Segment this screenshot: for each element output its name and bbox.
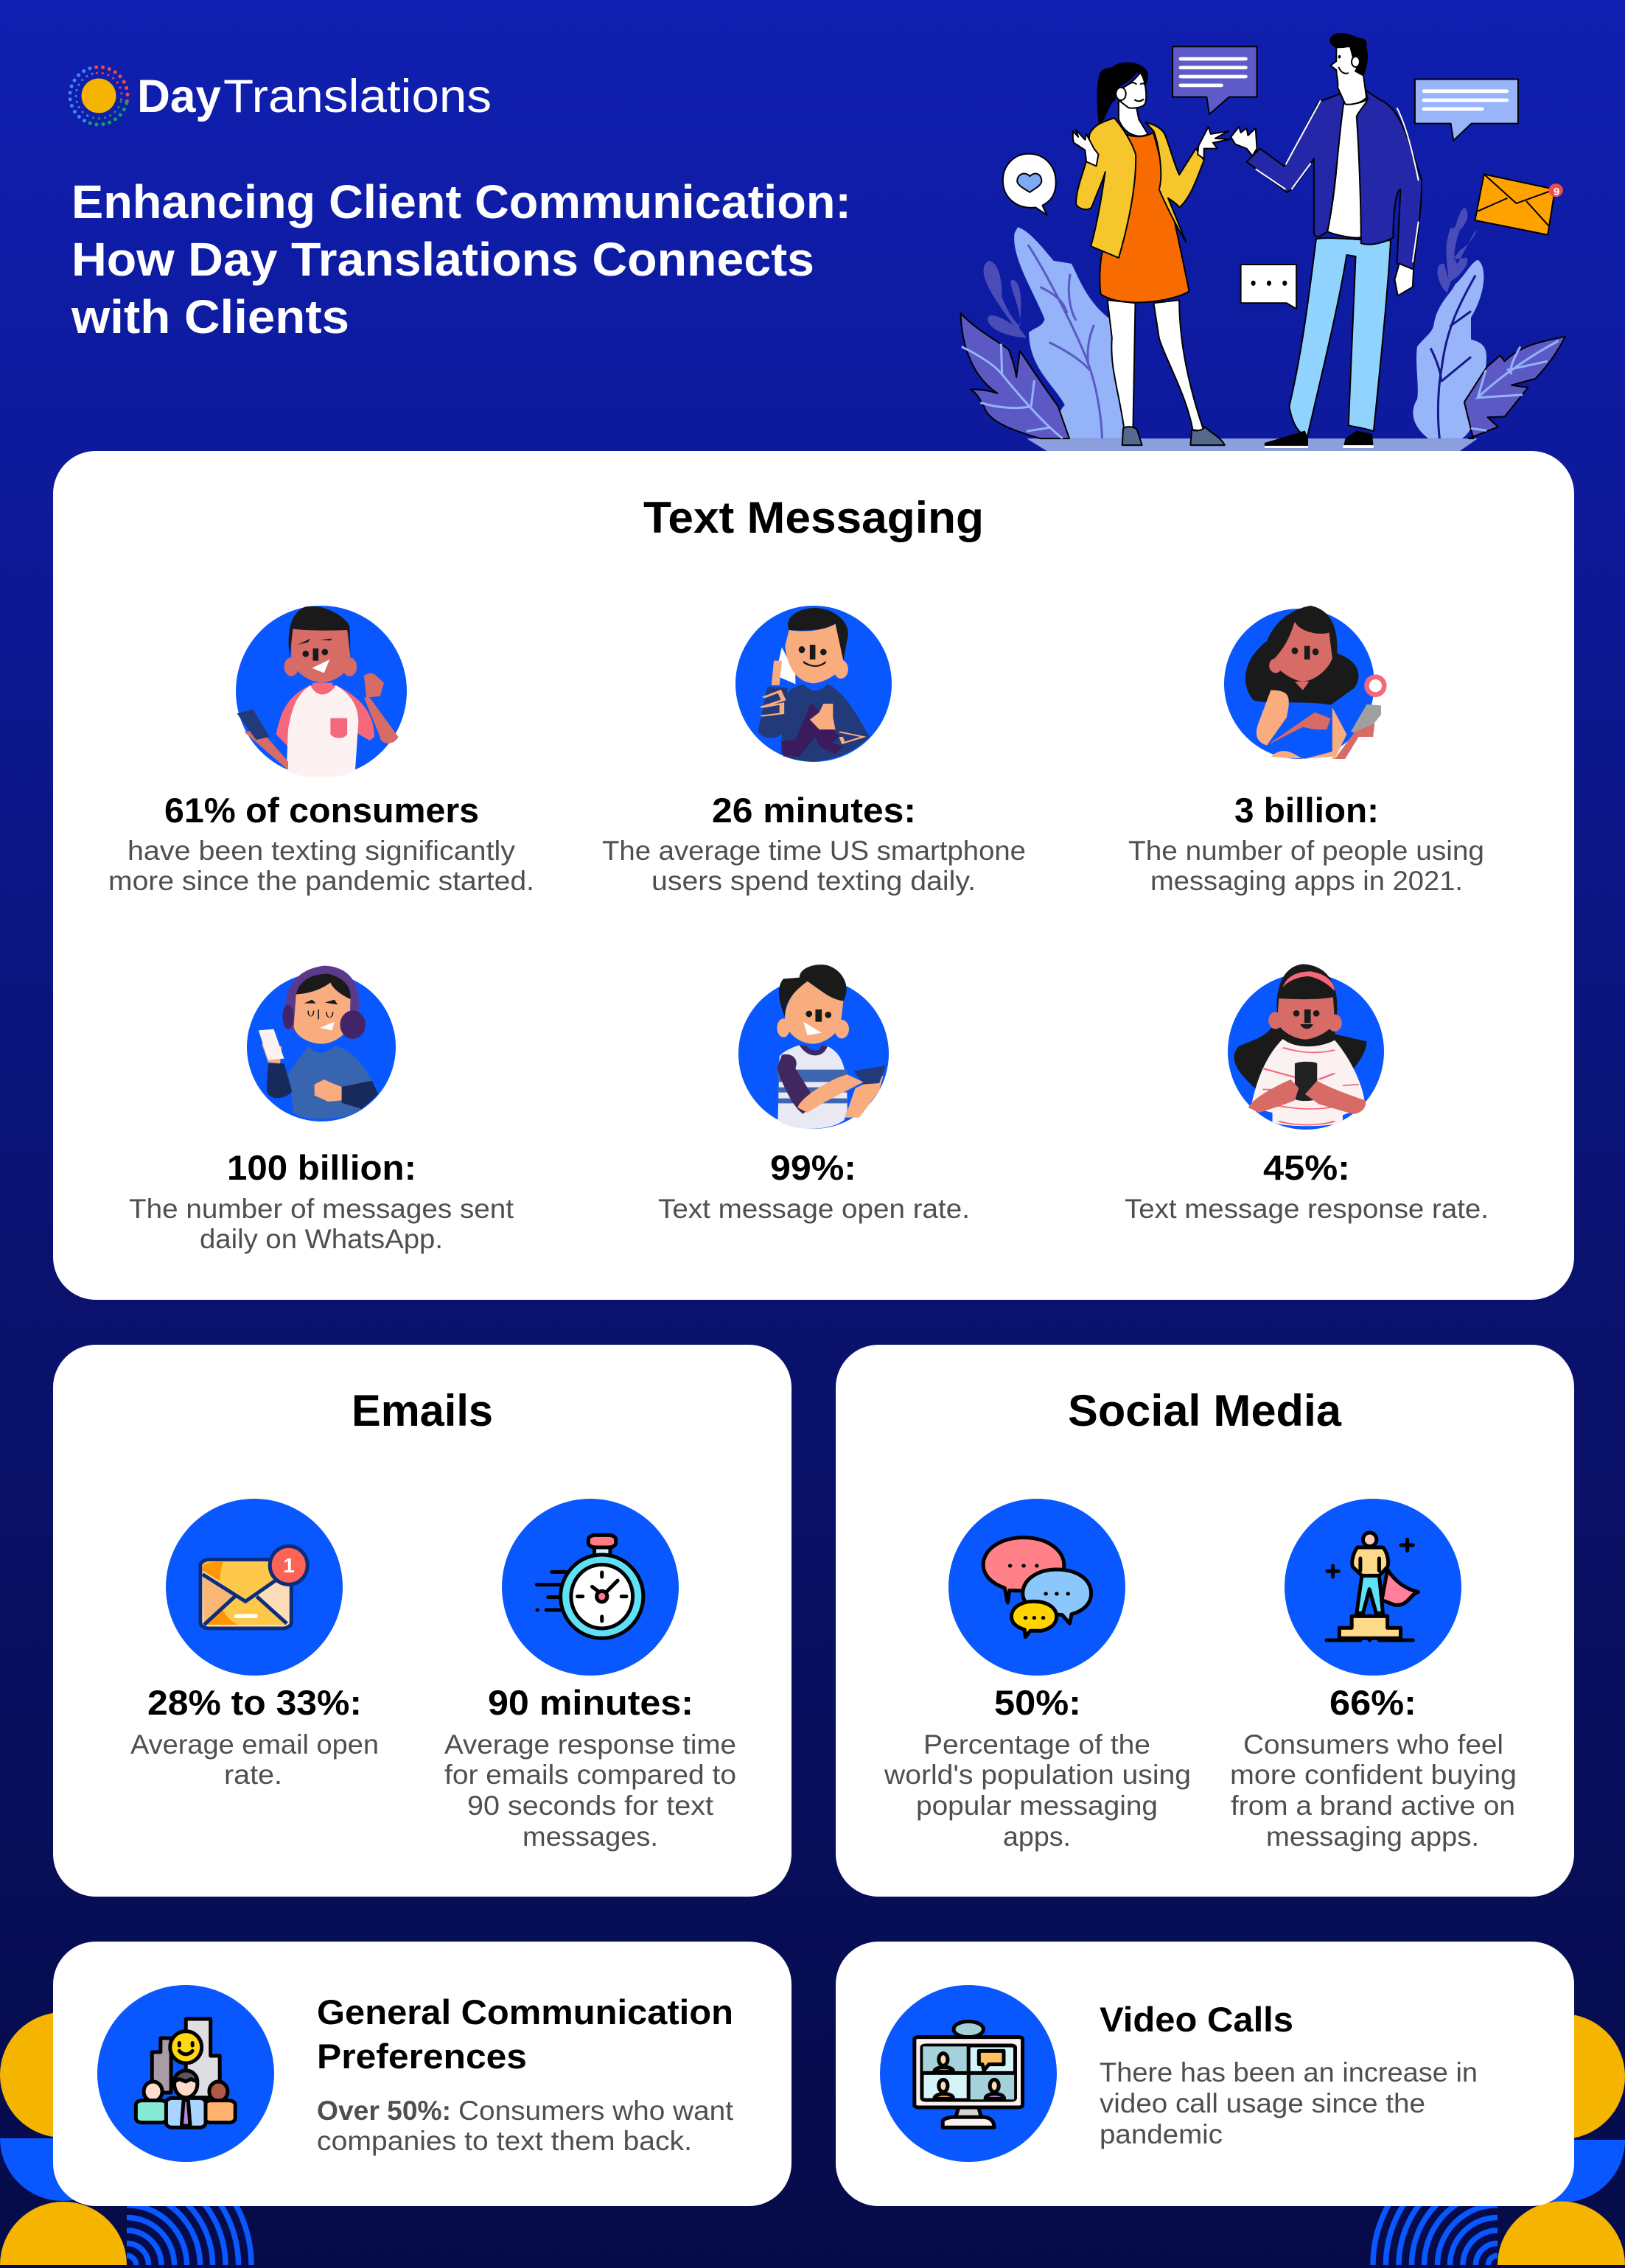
- heading: Preferences: [317, 2037, 527, 2076]
- stat: 66%: from a brand active on: [1231, 1791, 1515, 1821]
- icon: blue speech bubble: [1415, 80, 1518, 141]
- stat text: row 2: [129, 1148, 1489, 1254]
- stat text: row 2: Text message response rate.: [1125, 1194, 1489, 1224]
- stat: 50%: world's population using: [884, 1760, 1191, 1790]
- icon: statue with cape: [1285, 1499, 1461, 1676]
- icon: ground: [1027, 438, 1478, 451]
- text block: video call usage since the: [1100, 2088, 1425, 2118]
- stat: 66%: Consumers who feel: [1243, 1729, 1503, 1760]
- title: Enhancing Client Communication:: [71, 175, 851, 228]
- icon: white ellipsis bubble: [1241, 265, 1296, 309]
- stat: 61% of consumers: [236, 606, 407, 777]
- stat: 100 billion: [247, 966, 396, 1121]
- stat: 26 minutes: [735, 606, 892, 762]
- icon: purple speech bubble: [1173, 46, 1257, 114]
- heading: Emails: [352, 1386, 493, 1435]
- stat text: row 2: Text message open rate.: [658, 1194, 970, 1224]
- logo: Day Translations: [70, 67, 492, 125]
- plants left: [961, 227, 1125, 438]
- stat: 28% to 33%: 28% to 33%:: [147, 1683, 362, 1722]
- panel: Video Calls: [836, 1942, 1574, 2206]
- icon: heart bubble: [1003, 154, 1056, 215]
- stat text: row 1: The average time US smartphone: [602, 836, 1026, 866]
- heading: Text Messaging: [643, 493, 984, 542]
- stat text: row 2: The number of messages sent: [129, 1194, 514, 1224]
- stat: 45%: [1228, 964, 1384, 1130]
- icon: envelope with notification: [166, 1499, 343, 1676]
- icon: envelope with notification: 1: [283, 1554, 295, 1577]
- icon: video call monitor: [880, 1985, 1057, 2162]
- stat text: row 1: users spend texting daily.: [651, 866, 976, 896]
- man: [1231, 33, 1422, 448]
- icon: stopwatch: [502, 1499, 679, 1676]
- decorative shapes: bottom right: [1373, 2014, 1625, 2265]
- woman: [1073, 62, 1230, 445]
- stat: 50%: popular messaging: [916, 1791, 1158, 1821]
- title: [71, 175, 851, 343]
- stat: 28% to 33%: rate.: [224, 1760, 282, 1790]
- stat text: row 1: 61% of consumers: [164, 791, 479, 830]
- text block: [1100, 2057, 1478, 2149]
- stat: 3 billion: [1224, 606, 1387, 759]
- stat: 90 minutes: for emails compared to: [444, 1760, 736, 1790]
- stat text: row 2: daily on WhatsApp.: [200, 1224, 443, 1254]
- stat text: row 1: more since the pandemic started.: [108, 866, 534, 896]
- heading: [317, 1992, 733, 2076]
- stat text: row 1: 3 billion:: [1234, 791, 1379, 830]
- logo: Day Translations: Day: [137, 71, 221, 122]
- icon: orange envelope: [1475, 174, 1563, 235]
- heading: Social Media: [1068, 1386, 1342, 1435]
- title: How Day Translations Connects: [71, 233, 814, 286]
- stat: 66%: 66%:: [1329, 1683, 1416, 1722]
- title: with Clients: [71, 290, 349, 343]
- stat: 66%: more confident buying: [1230, 1760, 1517, 1790]
- stat: 50%: [884, 1683, 1191, 1852]
- panel: Text Messaging: [53, 451, 1574, 1300]
- stat: 50%: Percentage of the: [923, 1729, 1150, 1760]
- stat: 90 minutes: 90 seconds for text: [467, 1791, 714, 1821]
- text block: pandemic: [1100, 2119, 1223, 2149]
- stat text: row 1: have been texting significantly: [127, 836, 516, 866]
- icon: people with city and smiley balloon: [97, 1985, 274, 2162]
- stat: 66%: [1230, 1683, 1517, 1852]
- stat: 90 minutes: 90 minutes:: [488, 1683, 693, 1722]
- panel: Emails: [53, 1345, 791, 1897]
- stat: 99%: [738, 965, 889, 1129]
- stat text: row 2: 45%:: [1263, 1148, 1350, 1187]
- text block: There has been an increase in: [1100, 2057, 1478, 2087]
- text block: companies to text them back.: [317, 2126, 692, 2156]
- text block: Consumers who want: [458, 2096, 734, 2126]
- stat text: row 1: [108, 791, 1484, 896]
- stat text: row 1: The number of people using: [1128, 836, 1484, 866]
- stat: 90 minutes: Average response time: [444, 1729, 736, 1760]
- stat text: row 1: 26 minutes:: [712, 791, 916, 830]
- icon: chat bubbles: [948, 1499, 1125, 1676]
- heading: Video Calls: [1100, 2000, 1293, 2039]
- panel: General Communication Preferences: [53, 1942, 791, 2206]
- stat text: row 1: messaging apps in 2021.: [1150, 866, 1463, 896]
- stat: 90 minutes: messages.: [523, 1821, 658, 1852]
- stat text: row 2: 99%:: [770, 1148, 856, 1187]
- envelope badge number: 9: [1554, 186, 1559, 198]
- logo: Day Translations: Translations: [223, 71, 492, 122]
- decorative shapes: bottom left: [0, 2012, 251, 2265]
- stat: 90 minutes: [444, 1683, 736, 1852]
- stat: 28% to 33%: [130, 1683, 379, 1790]
- stat: 66%: messaging apps.: [1266, 1821, 1479, 1852]
- stat text: row 2: 100 billion:: [227, 1148, 416, 1187]
- heading: General Communication: [317, 1992, 733, 2031]
- text block: [317, 2096, 734, 2156]
- panel: Social Media: [836, 1345, 1574, 1897]
- text block: Over 50%:: [317, 2096, 451, 2126]
- stat: 28% to 33%: Average email open: [130, 1729, 379, 1760]
- illustration: two people talking with plants and message bubbles: [961, 33, 1565, 451]
- plants right: [1413, 208, 1565, 438]
- stat: 50%: apps.: [1003, 1821, 1071, 1852]
- stat: 50%: 50%:: [994, 1683, 1081, 1722]
